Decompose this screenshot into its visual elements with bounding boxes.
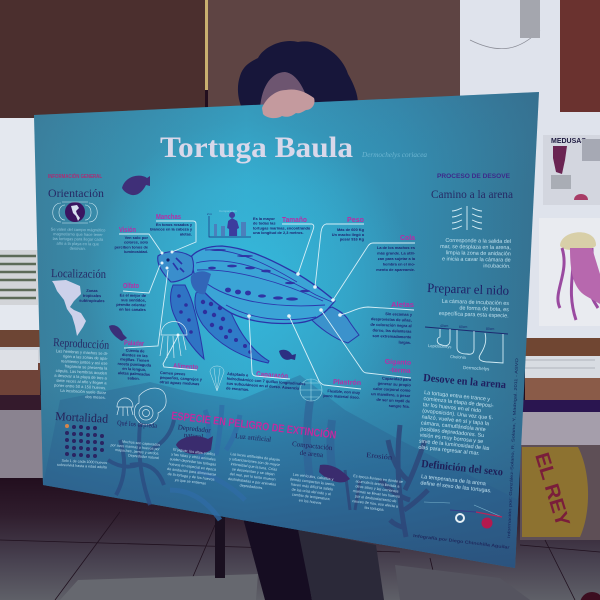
callout: peso: Un macho llegó a <box>332 232 365 237</box>
threat: depredador natural: ya que se entierran <box>175 478 206 486</box>
callout: peso <box>313 217 365 289</box>
yellow bag <box>522 447 588 537</box>
text: orientación: las tortugas para llegar cada <box>53 236 104 242</box>
threat: depredador natural: huevos en especial en época <box>168 462 217 472</box>
text: reproducción: siete veces al año y llegan a <box>56 378 107 385</box>
threat: compactación de arena: en los huevos <box>299 498 322 505</box>
diagram: nest depths: 40cm <box>440 324 448 328</box>
callout: manchas: Manchas <box>156 214 181 221</box>
chart: human size comparison <box>207 209 311 237</box>
text: reproducción: dos meses. <box>85 394 106 400</box>
text: desove: cámara, camuflándola ante <box>421 420 486 433</box>
callout: alimento: otras aguas medusas <box>159 379 199 386</box>
callout: caparazón: Caparazón <box>256 371 288 380</box>
callout: caparazón: sus subcutáneos en el dorso. Ausencia <box>226 381 300 391</box>
icon: small fish <box>279 350 296 360</box>
callout: paladar: aletas palmeadas <box>118 370 150 377</box>
section: natural predators: Qué los depreda <box>117 419 158 430</box>
wall posters: EL REY <box>530 450 574 530</box>
threat: compactación de arena: hacen más difícil la salida <box>291 482 334 492</box>
threat: luz artificial: Las luces artificiales de playas <box>230 452 280 462</box>
text: reproducción: La incubación suele durar <box>60 388 107 395</box>
text: orientación: magnetismo que hace tener <box>53 231 103 237</box>
threat: erosión: las tortugas. <box>364 506 385 512</box>
head <box>158 252 194 282</box>
text: size: de todas las <box>253 221 276 226</box>
callout: cola <box>331 235 416 302</box>
text: mapaches, perros y cerdos. <box>115 448 159 456</box>
callout: gigantotermia: de ser un reptil de <box>376 397 411 404</box>
text: desove: visión es muy borrosa y se <box>419 432 483 445</box>
icon: male symbol <box>456 514 464 522</box>
section: natural predators <box>110 419 161 460</box>
threat: erosión: marinas se llevan los huevos <box>353 489 400 499</box>
section: preparar el nido <box>425 280 509 371</box>
text: reproducción: fragancia se presenta la <box>65 363 108 371</box>
callout: gigantotermia: -terma <box>389 367 411 375</box>
text: desove: sirve de la luminosidad de las <box>419 439 490 452</box>
callout: cola: La de los machos es <box>377 245 415 250</box>
scientific name: Dermochelys coriacea <box>361 151 428 159</box>
text: desove: (ovoposición). Una vez que fi- <box>422 408 494 422</box>
section: definición del sexo <box>420 458 504 528</box>
section: desove en la arena <box>418 372 507 458</box>
threat: erosión: cauces de ríos, eso afecta a <box>352 499 399 509</box>
rear flipper <box>308 307 359 343</box>
turtle illustration <box>158 246 359 363</box>
callout: visión: Ven solo por <box>125 235 148 240</box>
text: desove: comienza la etapa de deposi- <box>423 396 494 409</box>
callout: paladar: en la lengua, <box>122 366 146 372</box>
threat: depredador natural <box>166 423 219 487</box>
section: definición del sexo: Definición del sexo <box>421 458 504 479</box>
credit: infografía: Infografía por Diego Chinchilla Aguilar <box>413 533 510 550</box>
text: camino: e inicia a cavar la cámara de <box>442 256 511 264</box>
callout: gigantotermia: un mamífero, a pesar <box>371 391 411 398</box>
carapace spots <box>208 249 310 301</box>
text: orientación: Se valen del campo mágnético <box>51 227 106 232</box>
callout: visión <box>114 227 164 254</box>
section: reproducción <box>53 335 109 400</box>
chart: human size comparison: 2 m <box>207 212 213 216</box>
text: definición: La temperatura de la arena <box>421 474 486 487</box>
callout: caparazón: Adaptado e <box>227 371 249 378</box>
chart: human size comparison: Comparación <box>219 209 237 213</box>
callout: gigantotermia: sangre fría. <box>389 403 410 409</box>
text: nido: de forma de bota, es <box>459 305 509 313</box>
callout: visión: colores, solo <box>124 240 149 245</box>
diagram: nest depths: 60cm <box>459 325 467 329</box>
text: Depredador natural <box>128 453 159 460</box>
poster <box>34 92 539 568</box>
text: nido: específica para esta especie. <box>439 311 509 319</box>
callout: caparazón: hidrodinámico con 7 quillas longitudinales <box>227 376 306 386</box>
section: camino a la arena <box>431 187 514 270</box>
icons: jellyfish and snail outlines <box>117 388 166 425</box>
icon: fish <box>176 436 213 454</box>
icon: plastron <box>300 379 322 401</box>
threat: compactación de arena: demás compactan la arena, <box>290 477 335 487</box>
threat: erosión: Es época lluviosa en donde se <box>353 474 403 484</box>
icon: jellyfish <box>160 322 187 358</box>
callout: plastrón: poco material óseo. <box>323 393 360 400</box>
callout: manchas: aletas. <box>180 231 192 236</box>
text: camino: Corresponde a la salida del <box>445 238 511 245</box>
threat: erosión: Erosión <box>366 451 393 462</box>
callout: cola: mento de apareamie. <box>376 267 415 272</box>
diagram: nest depths: Dermochelys <box>463 365 490 371</box>
threat: erosión: acumula la arena llevada a <box>355 479 401 489</box>
underwater silhouettes <box>43 375 518 568</box>
callout: peso: pesar 916 Kg <box>340 237 365 242</box>
callout: aletas: Sin escamas y <box>385 311 413 317</box>
callout: aletas: de coloración negra al <box>370 322 412 328</box>
threat: erosión <box>349 451 403 514</box>
section: orientación <box>48 186 106 251</box>
callout: manchas: En tonos rosados y <box>156 222 193 227</box>
silhouette: turtle keeper <box>227 212 239 236</box>
icon: female symbol <box>482 518 492 528</box>
text: camino: mar, se desplaza en la arena, <box>440 244 511 251</box>
callout: tamaño: Tamaño <box>282 217 307 224</box>
text: reproducción: Las hembras y machos se di- <box>56 348 109 356</box>
callout: gigantotermia: Giganto <box>384 359 411 367</box>
callout: gigantotermia <box>319 308 412 409</box>
icon: globe with magnetic field <box>53 202 97 223</box>
threat: erosión: por el desbordamiento de <box>355 494 397 503</box>
section: orientación: Orientación <box>48 186 104 200</box>
icon: fish <box>319 465 350 482</box>
threat: depredador natural: Depredador <box>177 423 212 435</box>
floor tile lines <box>0 512 600 600</box>
callout: paladar: receta puntiaguda <box>117 361 152 368</box>
callout: peso: Más de 600 Kg <box>337 227 365 232</box>
callout: paladar: saben. <box>127 375 140 381</box>
threat: luz artificial: deshidratadas o por animales <box>228 477 276 487</box>
callout: gigantotermia: generar su propio <box>378 381 412 387</box>
text: desove: posibles depredadores. Su <box>420 426 484 439</box>
heading: especie en peligro de extinción: ESPECIE EN PELIGRO DE EXTINCIÓN <box>171 409 337 442</box>
callout: cola: hembra en el mo- <box>383 262 416 266</box>
chart: sex by temperature <box>424 502 502 528</box>
section: mortalidad <box>55 409 109 469</box>
callout: visión: luminosidad. <box>124 249 148 254</box>
section: localización: Localización <box>51 266 106 281</box>
callout: paladar: mejillas. Tienen <box>120 356 150 363</box>
text: zonas tropicales: subtropicales <box>79 298 105 303</box>
callout: alimento <box>159 322 203 386</box>
callout: plastrón <box>279 314 361 401</box>
text: desove: nalizó, vuelve en sí y tapa la <box>421 414 489 427</box>
text: desove: tar los huevos en el nido <box>423 402 481 414</box>
callout: alimento: pequeños, cangrejos y <box>160 375 203 382</box>
threat: compactación de arena: de las crías del nido y el <box>291 487 331 496</box>
callout: peso: Peso <box>347 217 364 224</box>
person behind poster <box>215 41 384 600</box>
carapace ridges <box>196 250 332 320</box>
icon: small fish <box>109 325 127 341</box>
section heading: proceso de desove: PROCESO DE DESOVE <box>437 173 511 180</box>
section: localización <box>51 266 106 336</box>
threat: compactación de arena: cambio de temperatura <box>292 493 331 501</box>
section: camino a la arena: Camino a la arena <box>431 187 514 201</box>
callout: gigantotermia: calor corporal como <box>373 386 411 393</box>
title <box>160 131 428 164</box>
callout: visión: perciben tonos de <box>114 244 149 249</box>
threat: compactación de arena: Compactación <box>292 440 333 452</box>
wall posters: MEDUSAS <box>551 138 586 145</box>
callout: manchas: blancos en la cabeza y <box>150 227 193 232</box>
text: Muchos son capturados <box>122 440 160 447</box>
callout: aletas: desprovistas de uñas, <box>371 316 412 323</box>
section: desove en la arena: Desove en la arena <box>423 372 507 391</box>
callout: paladar: dientes en las <box>122 352 148 358</box>
text: nido: La cámara de incubación es <box>442 299 509 307</box>
text: reproducción: cópula. Las hembras acuden <box>56 368 107 376</box>
diagram: nest depths: Lepidochelys <box>428 343 452 349</box>
callout: paladar: Paladar <box>124 340 144 348</box>
near front flipper <box>195 290 269 363</box>
wall posters <box>0 135 600 537</box>
threat: compactación de arena <box>287 440 350 507</box>
text: zonas tropicales: tropicales <box>83 293 101 298</box>
text: reproducción: a desovar a la playa de tres a <box>54 373 108 381</box>
threat: luz artificial: y urbanizaciones son de mayor <box>229 457 281 467</box>
threat: luz artificial: intensidad que la luna. Crías <box>230 462 277 472</box>
section: mortalidad: Mortalidad <box>55 409 109 426</box>
callout: alimento: Alimento <box>173 363 198 371</box>
diagram: nest depths: Chelonia <box>450 354 467 360</box>
text: desove: La tortuga entra en trance y <box>424 390 491 403</box>
text: size: Es la mayor <box>253 216 275 221</box>
callout: aletas: dorso, las delanteras <box>372 327 412 334</box>
callout: tamaño <box>282 217 314 276</box>
threat: compactación de arena: Los vehículos, caballos y <box>293 473 334 482</box>
text: mortalidad: sobrevivirá hasta a edad adulta <box>57 463 107 469</box>
section: reproducción: Reproducción <box>53 335 109 352</box>
poster board <box>34 92 539 568</box>
callout: aletas: son extremadamente <box>372 333 412 339</box>
hand gripping the poster <box>262 89 315 118</box>
threat: depredador natural: de la tortuga y de los huevos <box>167 472 215 482</box>
callout: olfato: Es el mejor de <box>120 293 147 298</box>
icon: dark fish <box>122 176 150 195</box>
threat: depredador natural: natural <box>183 431 204 441</box>
threat: depredador natural: El jaguar, los altos cuellos <box>173 447 216 457</box>
text: reproducción: reamiento juntos y así ese <box>61 358 108 366</box>
title: Tortuga Baula <box>160 131 353 164</box>
threat: depredador natural: suelen depredar las tortugas <box>169 457 216 467</box>
callout: caparazón: de escamas. <box>226 385 249 392</box>
threat: luz artificial <box>226 432 281 492</box>
text: reproducción: poner entre 50 a 150 huevos. <box>54 383 106 390</box>
callout: aletas: largas. <box>398 340 411 345</box>
credit: vertical: Información por: González-Solano, R. Solano, Y. Madrigal. 2011 - ASVO <box>506 358 519 538</box>
text: por aves marinas o huevos por <box>110 443 161 451</box>
threat: erosión: otros sitios y las corrientes <box>355 484 399 494</box>
icon: shell <box>210 366 224 391</box>
callout: olfato: en los canales <box>119 307 146 312</box>
diagram: nest depths: 80cm <box>486 327 494 331</box>
callout: aletas: Aletas <box>391 302 414 309</box>
callout: olfato <box>116 262 164 312</box>
map: americas <box>52 280 86 336</box>
text: desove: olas para regresar al mar. <box>418 445 480 457</box>
threat: compactación de arena: de arena <box>299 449 324 459</box>
callout: visión: Visión <box>119 227 136 234</box>
callout: olfato: sus sentidos, <box>121 297 146 303</box>
text: reproducción: rigen a las zonas de apa- <box>63 354 109 361</box>
threat: luz artificial: del mar, por lo tanto mueren <box>230 472 276 482</box>
text: camino: limpia la zona de anidación <box>446 250 511 257</box>
text: orientación: año a la playa en la que <box>56 241 100 246</box>
callout: plastrón: Flexible, con muy <box>327 388 361 395</box>
far front flipper <box>171 285 204 359</box>
callout: gigantotermia: Capacidad para <box>382 375 412 382</box>
carapace <box>190 246 335 324</box>
threat: depredador natural: y las ratas y otros animales <box>171 452 216 462</box>
text: size: tortugas marinas, encontrando <box>253 225 311 230</box>
text: orientación: desovan. <box>70 246 86 251</box>
text: camino: incubación. <box>483 263 511 270</box>
callout: paladar: Cuenta de <box>126 348 145 354</box>
section heading: información general: INFORMACIÓN GENERAL <box>48 172 102 180</box>
flipper spots <box>177 271 252 354</box>
callout: caparazón <box>210 314 306 396</box>
text: mortalidad: Solo 1 de cada 1000 huevos <box>61 459 107 465</box>
callout: plastrón: Plastrón <box>333 379 361 387</box>
threat: depredador natural: de anidación para alimentarse <box>167 467 216 477</box>
callout: alimento: Comen peces <box>160 370 185 376</box>
callout: cola: Cola <box>400 235 415 242</box>
callout: cola: zan para sujetar a la <box>378 256 416 261</box>
threat: luz artificial: depredadores. <box>239 483 264 490</box>
text: definición: define el sexo de las tortugas. <box>420 480 492 494</box>
text: size: una longitud de 2,3 metros. <box>253 230 304 235</box>
threat: luz artificial: se desorientan y se alejan <box>232 467 275 476</box>
callout: olfato: permite orientar <box>116 302 146 307</box>
diagram: nest depths <box>425 324 508 371</box>
text: zonas tropicales: Zonas <box>86 288 98 293</box>
section: preparar el nido: Preparar el nido <box>427 280 509 298</box>
threat: luz artificial: Luz artificial <box>235 432 271 444</box>
icon: turtle tracks <box>452 206 482 230</box>
callout: olfato: Olfato <box>123 283 139 290</box>
callout: cola: más grande. La utili- <box>377 250 416 256</box>
callout: aletas <box>338 302 414 345</box>
callout: manchas <box>150 214 196 254</box>
chart: grid of hatchlings <box>65 424 104 458</box>
callout: paladar <box>109 266 168 381</box>
